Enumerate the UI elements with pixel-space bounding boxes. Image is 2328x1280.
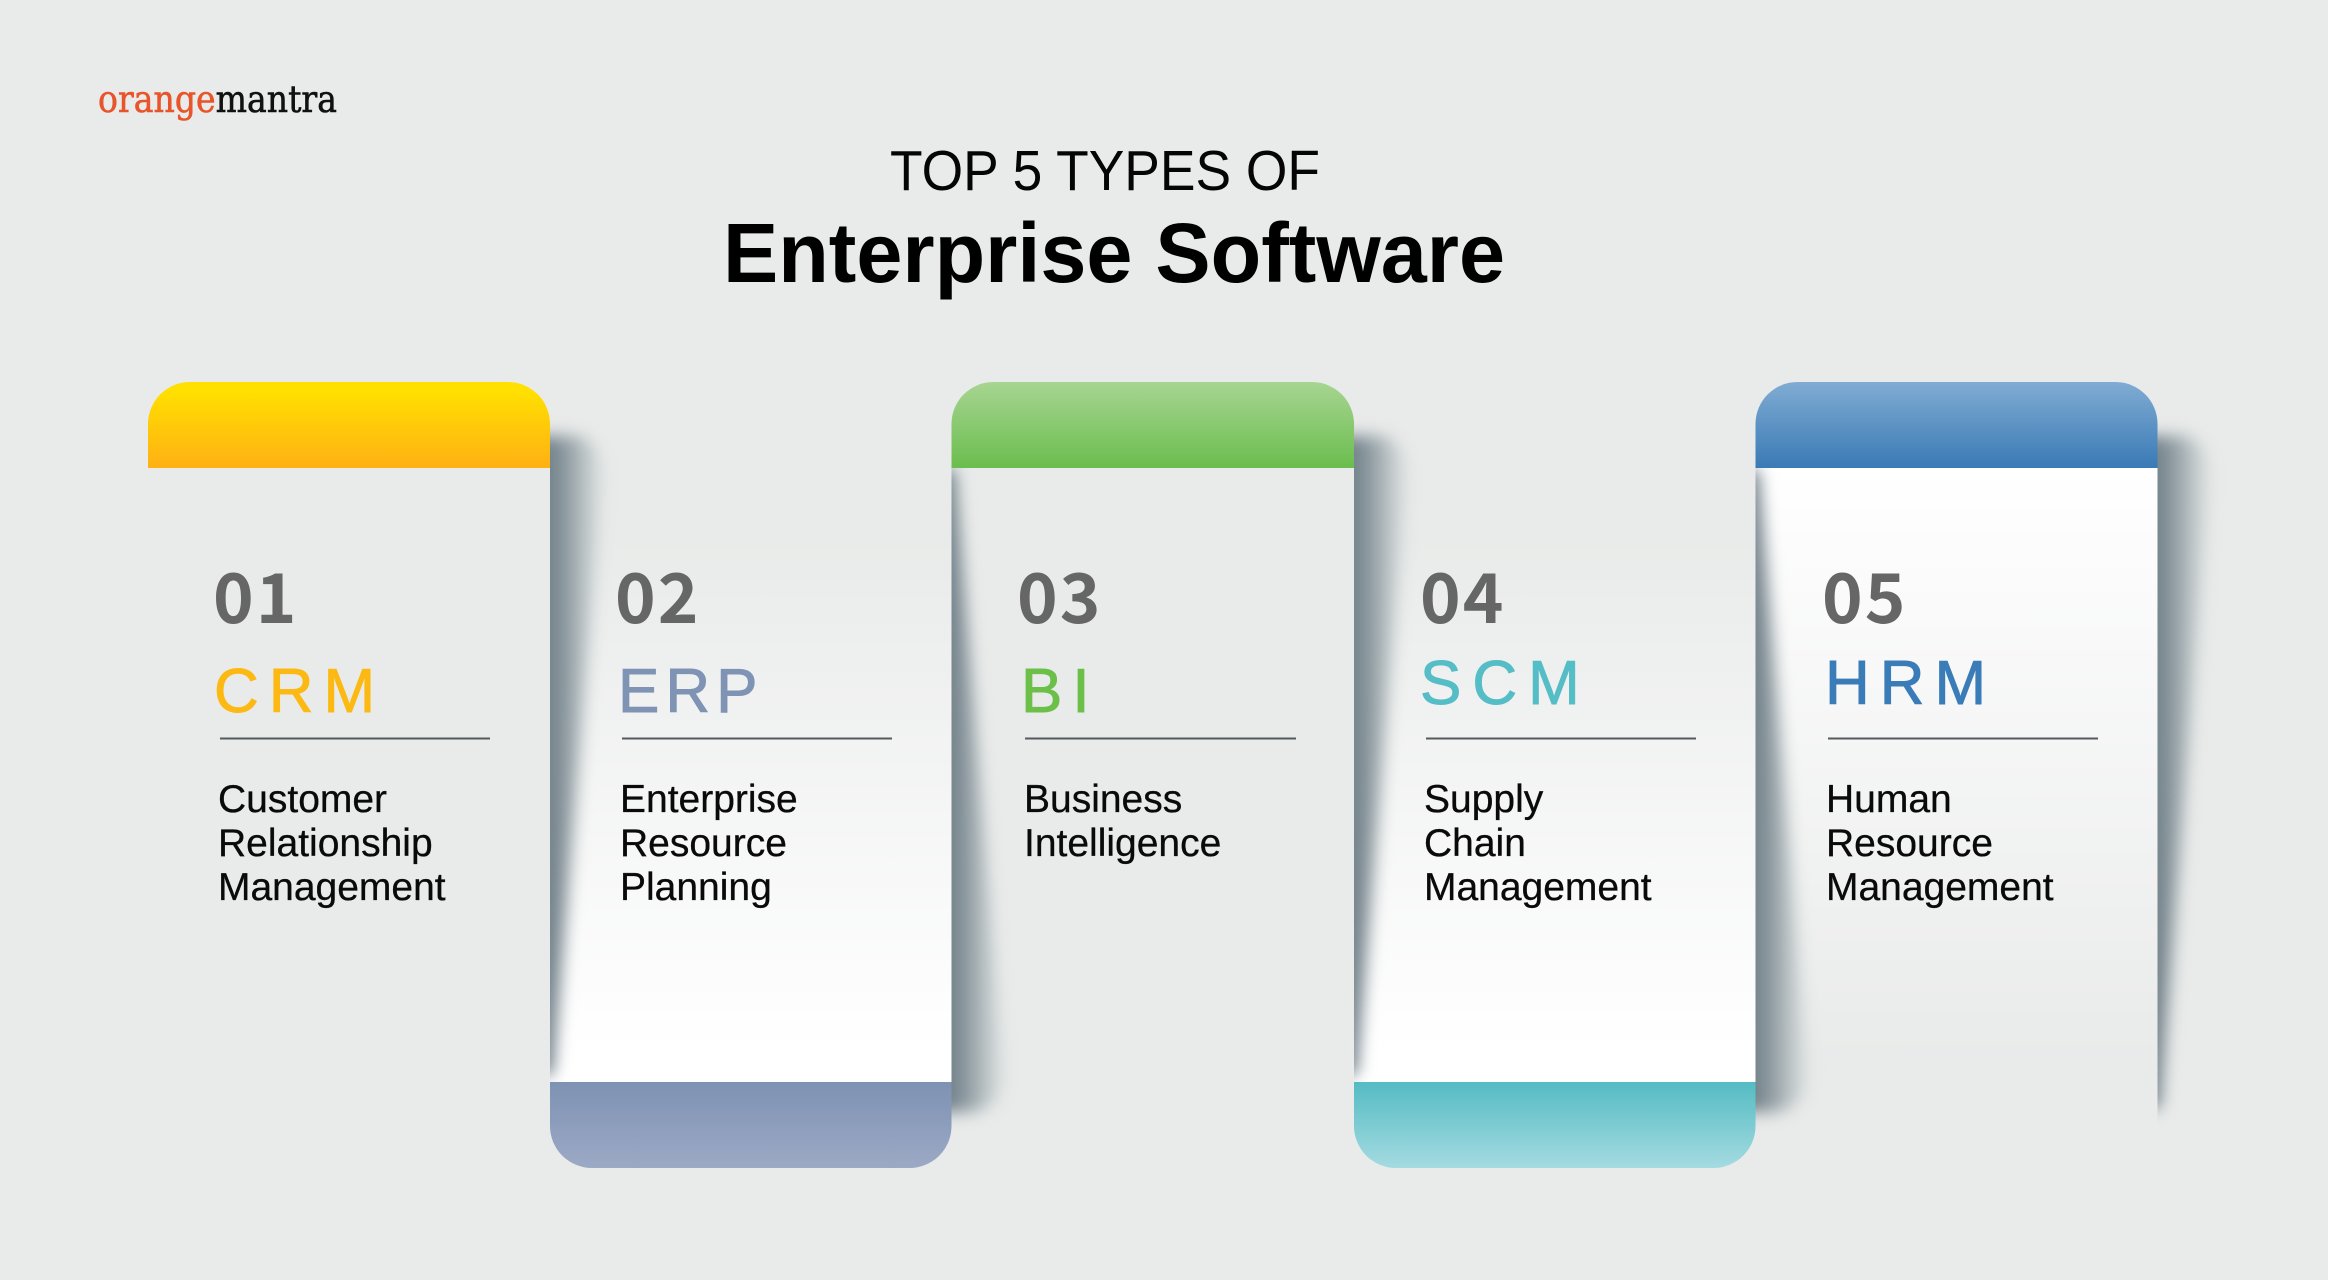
footer band: teal [1354, 1082, 1756, 1168]
description: Resource [1826, 822, 1993, 865]
shadow: right edge of card 4 [1756, 468, 1810, 1124]
description: Chain [1424, 822, 1526, 865]
label ERP: ERP [618, 657, 763, 726]
description: Relationship [218, 822, 433, 865]
card body: SCM gradient [1354, 468, 1756, 1082]
title line: top 5 types of: TOP 5 TYPES OF [890, 139, 1320, 203]
number 02: 02 [615, 543, 700, 643]
header band: yellow [148, 382, 550, 468]
description: Planning [620, 866, 772, 909]
description: Intelligence [1024, 822, 1221, 865]
description: Business [1024, 778, 1182, 821]
panel: card 5 HRM [1756, 382, 2158, 909]
description: Management [1424, 866, 1652, 909]
description: Human [1826, 778, 1952, 821]
shadow: right edge of card 2 [952, 468, 1006, 1124]
shadow: right edge of card 1 [550, 424, 605, 1082]
label SCM: SCM [1420, 649, 1591, 718]
description: Resource [620, 822, 787, 865]
number 05: 05 [1822, 543, 1907, 643]
panel: card 2 ERP [550, 543, 952, 1168]
panel: card 3 BI [952, 382, 1354, 865]
title line: enterprise software: Enterprise Software [723, 206, 1505, 300]
description: Enterprise [620, 778, 798, 821]
logo: orangemantra: orangemantra [98, 78, 337, 121]
card body: HRM gradient [1756, 468, 2158, 1122]
panel: card 4 SCM [1354, 543, 1756, 1168]
shadow: right edge of card 3 [1354, 424, 1409, 1082]
number 01: 01 [213, 543, 298, 643]
label CRM: CRM [214, 657, 385, 726]
header band: blue [1756, 382, 2158, 468]
header band: green [952, 382, 1354, 468]
label HRM: HRM [1825, 649, 1996, 718]
title [723, 139, 1505, 300]
panel: card 1 CRM [148, 382, 550, 909]
description: Management [218, 866, 446, 909]
card body: ERP gradient [550, 468, 952, 1082]
description: Supply [1424, 778, 1544, 821]
footer band: slate blue [550, 1082, 952, 1168]
description: Customer [218, 778, 387, 821]
number 03: 03 [1017, 543, 1102, 643]
label BI: BI [1021, 657, 1100, 726]
number 04: 04 [1420, 543, 1505, 643]
description: Management [1826, 866, 2054, 909]
shadow: right edge of card 5 [2158, 424, 2212, 1118]
